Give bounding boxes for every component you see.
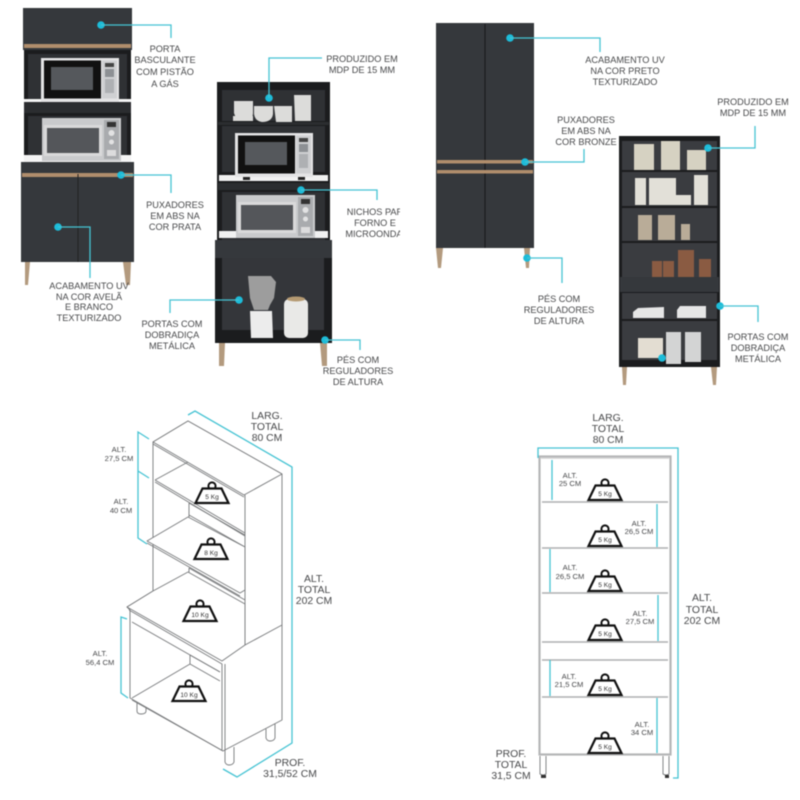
callout: MDP: MDP DE 15 MM	[329, 65, 395, 75]
panel: open shelf cabinet	[619, 136, 720, 385]
cyan outer dimension	[538, 448, 678, 778]
callout: bronze handles: PUXADORES	[557, 115, 615, 125]
label depth: 31,5/52 CM	[263, 769, 317, 780]
door split	[484, 24, 486, 248]
legs	[25, 262, 131, 285]
carcass	[619, 136, 720, 367]
top lift door	[23, 8, 132, 50]
label depth: PROF.	[496, 749, 526, 760]
niche panel	[189, 503, 245, 547]
shelf two	[147, 517, 245, 593]
callout: bronze handles	[521, 115, 617, 166]
callout: niches	[297, 186, 410, 239]
label height: TOTAL	[686, 605, 718, 616]
blender base	[250, 311, 273, 338]
label 25: 25 CM	[559, 479, 581, 488]
label 27,5: 27,5 CM	[626, 617, 654, 626]
weights	[588, 479, 622, 500]
base carcass	[215, 240, 332, 343]
label width: LARG.	[592, 413, 624, 424]
back panels	[222, 90, 325, 240]
callout: UV black: NA COR PRETO	[590, 66, 660, 76]
callout: metal hinges	[142, 296, 243, 351]
label depth: TOTAL	[495, 760, 527, 771]
jars	[638, 215, 690, 240]
callout: hinges: METÁLICA	[735, 354, 782, 364]
weight 8 kg: 8 Kg	[204, 550, 218, 557]
label width: 80 CM	[593, 435, 623, 446]
callout: UV finish: ACABAMENTO UV	[49, 281, 130, 291]
callout: bronze handles: COR BRONZE	[555, 137, 617, 147]
upper right side edge	[244, 495, 246, 645]
cups	[233, 95, 311, 122]
label 27,5: ALT.	[112, 445, 126, 454]
callout: metal hinges: METÁLICA	[149, 341, 196, 351]
callout: niches: MICROONDAS	[345, 229, 409, 239]
counter	[127, 572, 245, 661]
plates	[633, 306, 706, 318]
lower box	[129, 610, 222, 750]
callout: UV finish: TEXTURIZADO	[57, 313, 121, 323]
weight: 5 Kg	[598, 744, 612, 751]
callout: hinges: DOBRADIÇA	[731, 343, 786, 353]
callout: silver handles: PUXADORES	[146, 200, 204, 210]
shelf one	[155, 462, 245, 536]
doors	[436, 23, 534, 248]
callout: niches: NICHOS PARA	[347, 207, 410, 217]
callout: feet	[523, 254, 594, 326]
bronze handles	[437, 160, 533, 174]
label 26,5 right: 26,5 CM	[625, 527, 653, 536]
weight	[588, 674, 622, 695]
label 56,4: ALT.	[93, 649, 107, 658]
shelf	[218, 183, 329, 190]
niche back panels	[28, 54, 127, 155]
label 27,5: 27,5 CM	[105, 454, 133, 463]
label 40: 40 CM	[110, 506, 132, 515]
callout: lift door: A GÁS	[151, 79, 179, 89]
label 26,5 right: ALT.	[632, 519, 646, 528]
microwave top	[235, 133, 313, 180]
weight: 5 Kg	[598, 537, 612, 544]
callout: hinges	[658, 302, 788, 364]
callout: silver handles: COR PRATA	[149, 222, 202, 232]
blender jug	[248, 276, 276, 310]
weight 10 kg lower	[172, 680, 206, 701]
callout: feet: REGULADORES	[524, 305, 594, 315]
back panels	[622, 141, 717, 360]
lower niche panel	[189, 568, 245, 600]
silver handle strip	[22, 173, 133, 177]
base back	[222, 258, 324, 330]
callout: MDP: PRODUZIDO EM	[326, 54, 398, 64]
weight 10 kg	[184, 600, 216, 621]
height brackets	[121, 432, 149, 698]
callout: lift door: COM PISTÃO	[136, 67, 194, 77]
label width: LARG.	[251, 411, 283, 422]
callout: silver handles: EM ABS NA	[150, 211, 201, 221]
label depth: PROF.	[275, 758, 305, 769]
door split	[78, 174, 79, 262]
label 27,5: ALT.	[633, 609, 647, 618]
callout: metal hinges: DOBRADIÇA	[145, 330, 200, 340]
diagram: front cabinet dimensions	[491, 413, 720, 782]
panel: cabinet with lift door, silver handles	[21, 8, 134, 285]
jar	[284, 296, 308, 338]
bowls	[638, 338, 663, 358]
callout: niches: FORNO E	[354, 218, 396, 228]
frame	[540, 456, 670, 778]
label 34: ALT.	[635, 720, 649, 729]
tins	[634, 141, 706, 170]
label 26,5 left: 26,5 CM	[556, 572, 584, 581]
legs	[622, 367, 717, 385]
legs	[436, 248, 530, 268]
callout: MDP	[704, 97, 789, 152]
top shelf	[218, 122, 329, 125]
upper microwave	[41, 58, 119, 105]
weight 10 kg lower: 10 Kg	[180, 692, 198, 699]
label width: 80 CM	[252, 433, 282, 444]
weight	[588, 732, 622, 753]
callout: MDP: MDP DE 15 MM	[720, 108, 786, 118]
weight: 5 Kg	[598, 631, 612, 638]
lower cabinet doors	[21, 162, 134, 262]
label 40: ALT.	[114, 497, 128, 506]
label height: ALT.	[692, 593, 712, 604]
callout: UV finish: NA COR AVELÃ	[56, 292, 123, 302]
legs	[219, 343, 327, 366]
label height: TOTAL	[298, 585, 330, 596]
callout: UV black	[506, 34, 666, 87]
label 56,4: 56,4 CM	[86, 658, 114, 667]
outline drawing	[127, 421, 282, 765]
callout: bronze handles: EM ABS NA	[561, 126, 612, 136]
label 25: ALT.	[563, 471, 577, 480]
weights: 5 Kg	[598, 491, 612, 498]
drawer front	[620, 277, 719, 292]
label height: 202 CM	[684, 616, 720, 627]
callout: UV black: TEXTURIZADO	[593, 77, 657, 87]
weight: 5 Kg	[598, 686, 612, 693]
inner floor	[132, 655, 220, 698]
label height: ALT.	[304, 574, 324, 585]
microwave bottom	[236, 195, 315, 238]
white floors	[219, 175, 328, 238]
carcass	[217, 82, 330, 243]
callout: feet	[321, 336, 393, 387]
callout: UV black: ACABAMENTO UV	[585, 55, 666, 65]
weight 8 kg	[194, 538, 228, 559]
lower microwave	[42, 118, 121, 161]
weight 5 kg	[196, 482, 228, 503]
cyan shelf heights	[550, 460, 658, 753]
panel: closed cabinet	[436, 23, 534, 268]
label 21,5: ALT.	[562, 672, 576, 681]
middle shelf	[24, 102, 131, 113]
label depth: 31,5 CM	[491, 771, 531, 782]
label width: TOTAL	[592, 424, 624, 435]
weight	[588, 525, 622, 546]
silhouette	[127, 421, 282, 751]
panel: open cabinet with niches	[215, 82, 332, 366]
weight	[588, 570, 622, 591]
label width: TOTAL	[251, 422, 283, 433]
callout: MDP	[265, 54, 398, 102]
weight 10 kg: 10 Kg	[191, 612, 209, 619]
weight	[588, 619, 622, 640]
drawer front	[215, 240, 332, 258]
callout: metal hinges: PORTAS COM	[142, 319, 202, 329]
diagram: isometric cabinet dimensions	[86, 411, 332, 780]
callout: lift door: BASCULANTE	[134, 55, 196, 65]
boxes	[635, 175, 708, 205]
callout: lift door	[97, 21, 196, 89]
callout: feet: PÉS COM	[538, 294, 580, 304]
oven niches	[24, 50, 131, 162]
callout: lift door: PORTA	[150, 44, 181, 54]
spice jars	[652, 250, 711, 277]
weight: 5 Kg	[598, 582, 612, 589]
callout: UV finish: E BRANCO	[65, 302, 113, 312]
label height: 202 CM	[296, 596, 332, 607]
weight 5 kg: 5 Kg	[205, 494, 219, 501]
callout: feet: REGULADORES	[323, 366, 393, 376]
label 26,5 left: ALT.	[563, 563, 577, 572]
top panel	[153, 421, 282, 495]
label 21,5: 21,5 CM	[555, 680, 583, 689]
callout: hinges: PORTAS COM	[728, 332, 788, 342]
callout: silver handles	[117, 171, 204, 232]
bronze strip on lift door	[24, 44, 131, 48]
feet	[137, 703, 146, 714]
callout: feet: DE ALTURA	[534, 316, 585, 326]
callout: UV finish	[49, 223, 130, 323]
cyan dimension lines	[188, 411, 292, 777]
callout: feet: DE ALTURA	[333, 377, 384, 387]
stacked pots	[666, 332, 701, 364]
label 34: 34 CM	[631, 728, 653, 737]
white niche floors	[24, 99, 131, 162]
callout: MDP: PRODUZIDO EM	[717, 97, 789, 107]
callout: feet: PÉS COM	[337, 355, 379, 365]
